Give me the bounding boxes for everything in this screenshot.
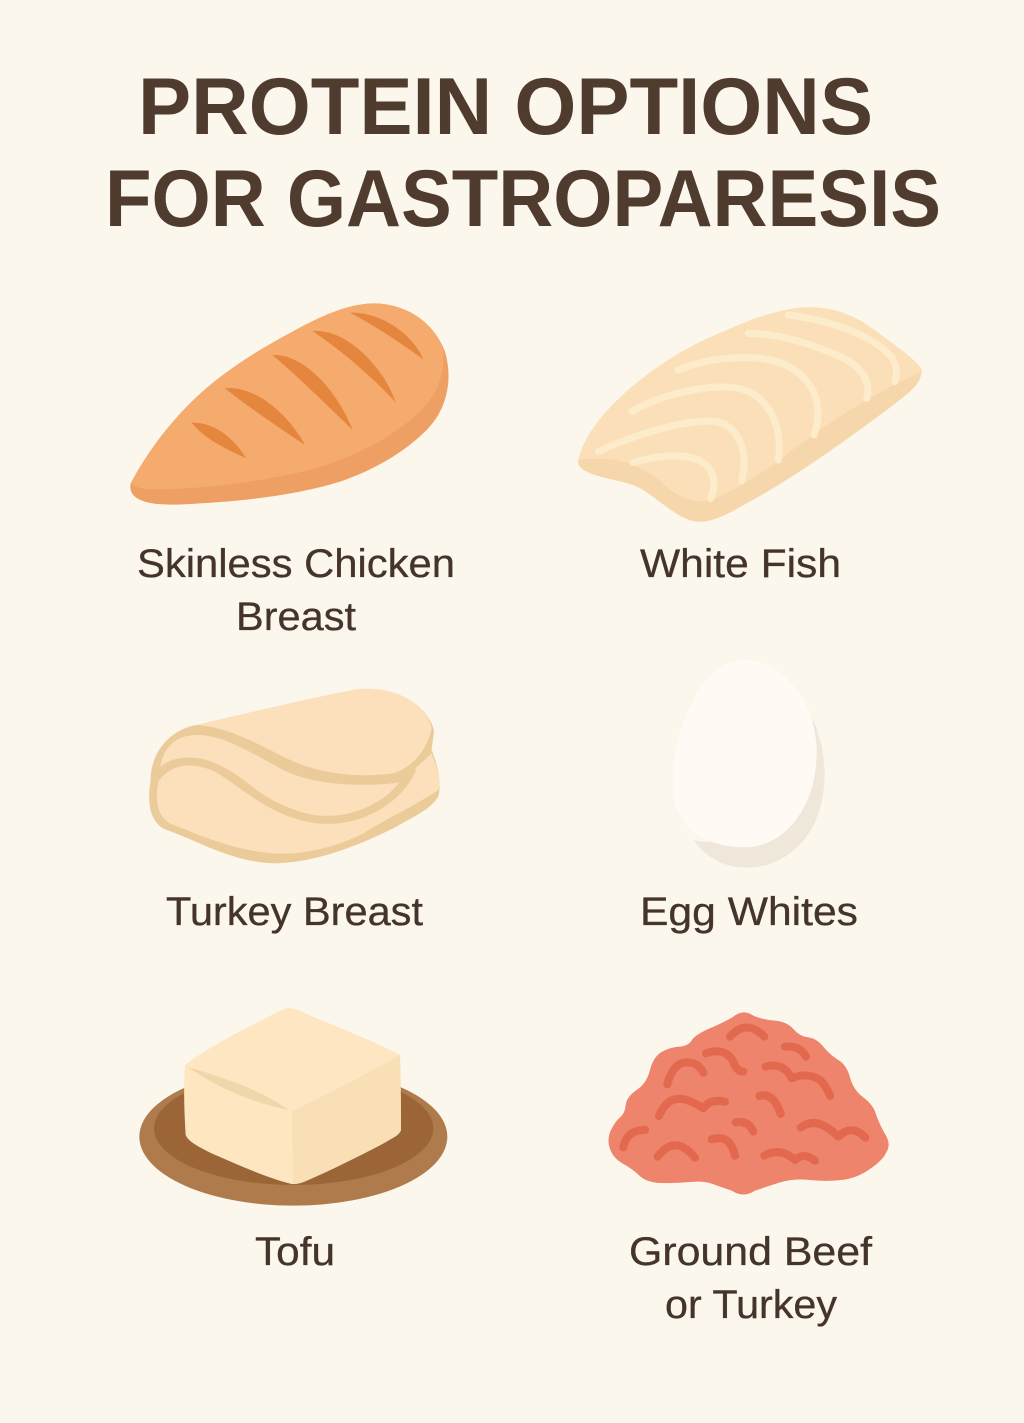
panel: ground beef or turkey [608,1012,889,1327]
panel: ground beef or turkey: or Turkey [665,1283,837,1327]
icon: chicken breast [130,303,449,505]
title [105,62,941,244]
label: skinless chicken breast: Skinless Chicken [137,542,455,586]
icon: turkey breast slices [149,689,440,863]
icon: white fish fillet [578,307,922,522]
panel: white fish [578,307,922,586]
label: ground beef or turkey: Ground Beef [629,1230,873,1274]
panel: skinless chicken breast: Breast [236,595,356,639]
panel: egg whites [640,660,858,934]
label: tofu: Tofu [255,1230,335,1274]
panel: turkey breast [149,689,440,934]
title: PROTEIN OPTIONS [138,62,873,152]
icon: egg white [673,660,825,868]
panel: skinless chicken breast [130,303,455,639]
panel: tofu [139,1008,447,1274]
label: egg whites: Egg Whites [640,890,858,934]
label: turkey breast: Turkey Breast [166,890,423,934]
icon: ground meat mound [608,1012,889,1194]
icon: tofu on plate [139,1008,447,1206]
label: white fish: White Fish [640,542,841,586]
title: FOR GASTROPARESIS [105,154,941,244]
